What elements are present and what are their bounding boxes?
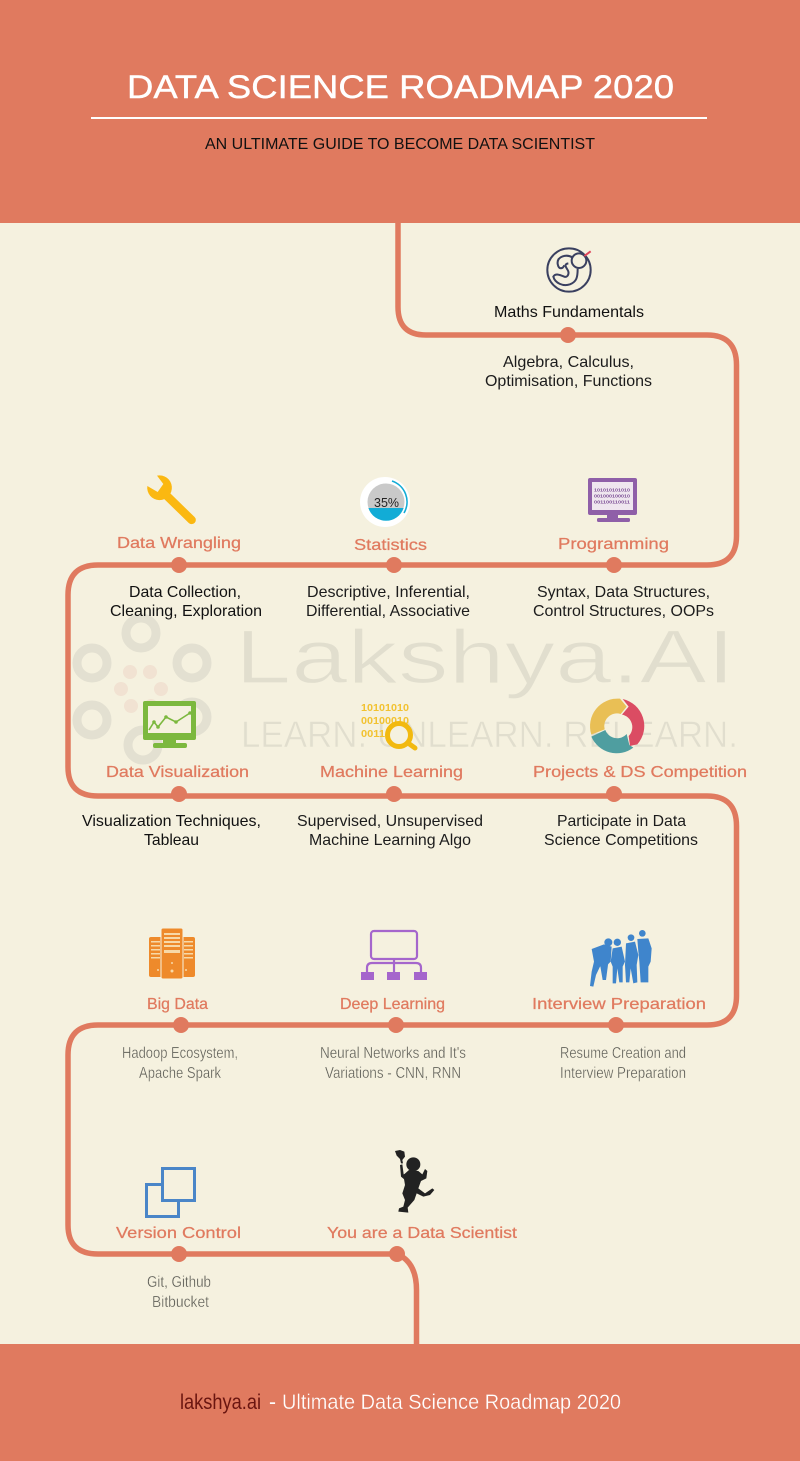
header band bbox=[0, 0, 800, 223]
step: Data Wrangling: Data Collection, bbox=[129, 584, 241, 601]
watermark: Lakshya.AI logo and tagline bbox=[77, 615, 738, 760]
step: Maths Fundamentals bbox=[485, 248, 652, 390]
icon: binary digits with magnifier: 00110011 bbox=[361, 729, 409, 740]
icon: binary digits with magnifier: 10101010 bbox=[361, 703, 409, 714]
subtitle: AN ULTIMATE GUIDE TO BECOME DATA SCIENTIST bbox=[205, 136, 595, 153]
step: Projects and DS Competition bbox=[533, 699, 747, 849]
icon: fetus bbox=[547, 248, 591, 292]
step: Statistics: Statistics bbox=[354, 537, 427, 554]
step: Deep Learning: Deep Learning bbox=[340, 996, 445, 1013]
step: Big Data bbox=[122, 928, 238, 1082]
icon: 35% gauge bbox=[360, 477, 410, 527]
step: Machine Learning: Supervised, Unsupervised bbox=[297, 813, 483, 830]
step: Machine Learning: Machine Learning bbox=[320, 764, 463, 781]
step: Interview Preparation: Interview Preparation bbox=[560, 1065, 686, 1082]
icon: 35% gauge: 35% bbox=[374, 495, 399, 510]
step: Data Visualization: Data Visualization bbox=[106, 764, 249, 781]
icon: circular arrows ring bbox=[590, 699, 644, 753]
step: Interview Preparation: Resume Creation and bbox=[560, 1045, 686, 1062]
step: Version Control: Version Control bbox=[116, 1225, 241, 1242]
step: Data Visualization bbox=[82, 701, 261, 849]
step: Interview Preparation bbox=[532, 930, 706, 1082]
step: Data Wrangling: Cleaning, Exploration bbox=[110, 603, 262, 620]
icon: purple monitor bbox=[588, 478, 637, 522]
step: Maths Fundamentals: Maths Fundamentals bbox=[494, 304, 644, 321]
step: Big Data: Hadoop Ecosystem, bbox=[122, 1045, 238, 1062]
icon: purple monitor: 001000100010 bbox=[594, 494, 631, 498]
step: Programming: Control Structures, OOPs bbox=[533, 603, 714, 620]
step: Version Control: Bitbucket bbox=[152, 1294, 209, 1311]
step: Data Wrangling: Data Wrangling bbox=[117, 535, 241, 552]
icon: network diagram bbox=[361, 931, 427, 980]
step: Statistics: Descriptive, Inferential, bbox=[307, 584, 470, 601]
step: Big Data: Apache Spark bbox=[139, 1065, 222, 1082]
step: Statistics bbox=[306, 477, 470, 620]
step: Statistics: Differential, Associative bbox=[306, 603, 470, 620]
icon: purple monitor: 101010101010 bbox=[594, 488, 631, 492]
step: Machine Learning bbox=[297, 703, 483, 849]
roadmap path bbox=[68, 223, 736, 1344]
icon: server towers bbox=[149, 928, 195, 979]
step: You are a Data Scientist: You are a Data Scientist bbox=[327, 1225, 518, 1242]
step: Version Control: Git, Github bbox=[147, 1274, 211, 1291]
step: Big Data: Big Data bbox=[147, 996, 208, 1013]
step: Data Wrangling bbox=[110, 475, 262, 620]
step: Programming: Syntax, Data Structures, bbox=[537, 584, 710, 601]
step: Version Control bbox=[116, 1168, 241, 1311]
step: Projects and DS Competition: Participate in Data bbox=[557, 813, 686, 830]
icon: binary digits with magnifier: 00100010 bbox=[361, 716, 409, 727]
step: Maths Fundamentals: Optimisation, Functions bbox=[485, 373, 652, 390]
icon: purple monitor: 001100110011 bbox=[594, 500, 631, 504]
icon: group of people silhouettes bbox=[590, 930, 652, 987]
watermark: Lakshya.AI logo and tagline: LEARN. UNLEARN. RELEARN. bbox=[241, 714, 738, 755]
step: Deep Learning: Neural Networks and It's bbox=[320, 1045, 466, 1062]
step: Maths Fundamentals: Algebra, Calculus, bbox=[503, 354, 634, 371]
step: Data Visualization: Tableau bbox=[144, 832, 199, 849]
step: Data Visualization: Visualization Techniques, bbox=[82, 813, 261, 830]
footer text: Ultimate Data Science Roadmap 2020 bbox=[282, 1391, 621, 1414]
footer text: lakshya.ai bbox=[180, 1391, 261, 1414]
title: DATA SCIENCE ROADMAP 2020 bbox=[127, 69, 674, 105]
icon: green monitor with line chart bbox=[143, 701, 196, 748]
icon: overlapping squares bbox=[146, 1168, 194, 1216]
watermark: Lakshya.AI logo and tagline: Lakshya.AI bbox=[235, 615, 735, 700]
step: You are a Data Scientist bbox=[327, 1150, 518, 1262]
step: Machine Learning: Machine Learning Algo bbox=[309, 832, 471, 849]
footer text: - bbox=[269, 1391, 276, 1414]
step: Programming: Programming bbox=[558, 536, 669, 553]
step: Deep Learning: Variations - CNN, RNN bbox=[325, 1065, 461, 1082]
footer band bbox=[0, 1344, 800, 1461]
step: Programming bbox=[533, 478, 714, 620]
step: Projects and DS Competition: Science Competitions bbox=[544, 832, 698, 849]
icon: dancing child silhouette bbox=[395, 1150, 434, 1213]
icon: binary digits with magnifier bbox=[361, 703, 415, 748]
step: Interview Preparation: Interview Preparation bbox=[532, 996, 706, 1013]
step: Deep Learning bbox=[320, 931, 466, 1082]
icon: wrench bbox=[147, 475, 192, 520]
step: Projects and DS Competition: Projects & DS Competition bbox=[533, 764, 747, 781]
